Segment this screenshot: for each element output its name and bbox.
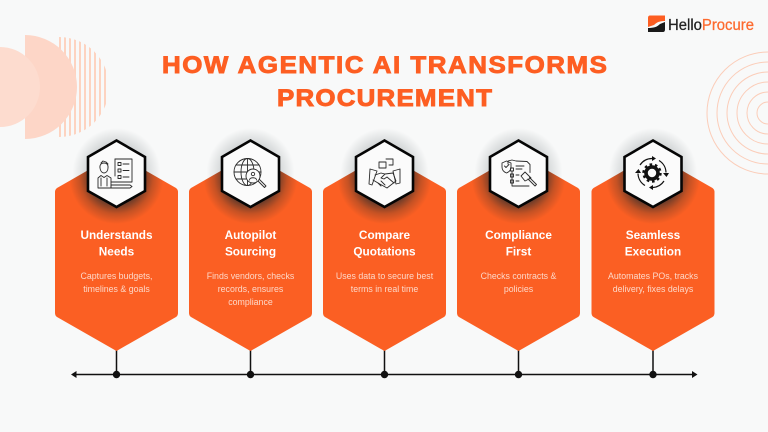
text: Uses data: terms in real time xyxy=(351,284,418,294)
text: Finds vendors: Finds vendors, checks xyxy=(207,271,295,281)
panel: Understands Needs xyxy=(55,154,178,351)
text: Uses data: Uses data to secure best xyxy=(336,271,434,281)
text: Automates POs: Automates POs, tracks xyxy=(608,271,699,281)
text: Finds vendors: compliance xyxy=(228,297,273,307)
icon: person with checklist xyxy=(88,140,145,207)
title: HOW AGENTIC AI TRANSFORMS xyxy=(162,52,607,79)
icon: compliance document and gavel xyxy=(490,140,547,207)
text: Captures budgets: timelines & goals xyxy=(83,284,150,294)
heading: Seamless Execution: Seamless xyxy=(626,228,681,242)
decoration: concentric rings xyxy=(707,52,768,174)
panel: Seamless Execution xyxy=(592,154,714,351)
title xyxy=(162,52,607,112)
timeline xyxy=(71,350,698,378)
faint icon shadows on background xyxy=(72,128,697,216)
text: Finds vendors: records, ensures xyxy=(218,284,284,294)
heading: Compliance First: Compliance xyxy=(485,228,552,242)
icon: globe with magnifier xyxy=(222,140,279,207)
logo: HelloProcure: HelloProcure xyxy=(668,17,754,34)
icon: handshake with quotes xyxy=(356,140,413,207)
icon shadows on panels xyxy=(71,171,698,222)
icon: gear with cycle arrows xyxy=(624,140,682,207)
heading: Understands Needs: Needs xyxy=(99,244,135,258)
heading: Autopilot Sourcing: Sourcing xyxy=(225,244,276,258)
text: Automates POs: delivery, fixes delays xyxy=(613,284,694,294)
heading: Compare Quotations: Quotations xyxy=(353,244,416,258)
heading: Understands Needs: Understands xyxy=(80,228,153,242)
text: Checks contracts: policies xyxy=(504,284,534,294)
title: PROCUREMENT xyxy=(277,85,492,112)
heading: Compliance First: First xyxy=(506,244,531,258)
decoration: left overlapping circles xyxy=(0,35,106,139)
heading: Compare Quotations: Compare xyxy=(359,228,411,242)
panel: Autopilot Sourcing xyxy=(189,154,312,351)
panel: Compliance First xyxy=(457,154,580,351)
heading: Seamless Execution: Execution xyxy=(625,244,681,258)
text: Checks contracts: Checks contracts & xyxy=(481,271,557,281)
panel: Compare Quotations xyxy=(323,154,446,351)
heading: Autopilot Sourcing: Autopilot xyxy=(225,228,276,242)
text: Captures budgets: Captures budgets, xyxy=(81,271,152,281)
